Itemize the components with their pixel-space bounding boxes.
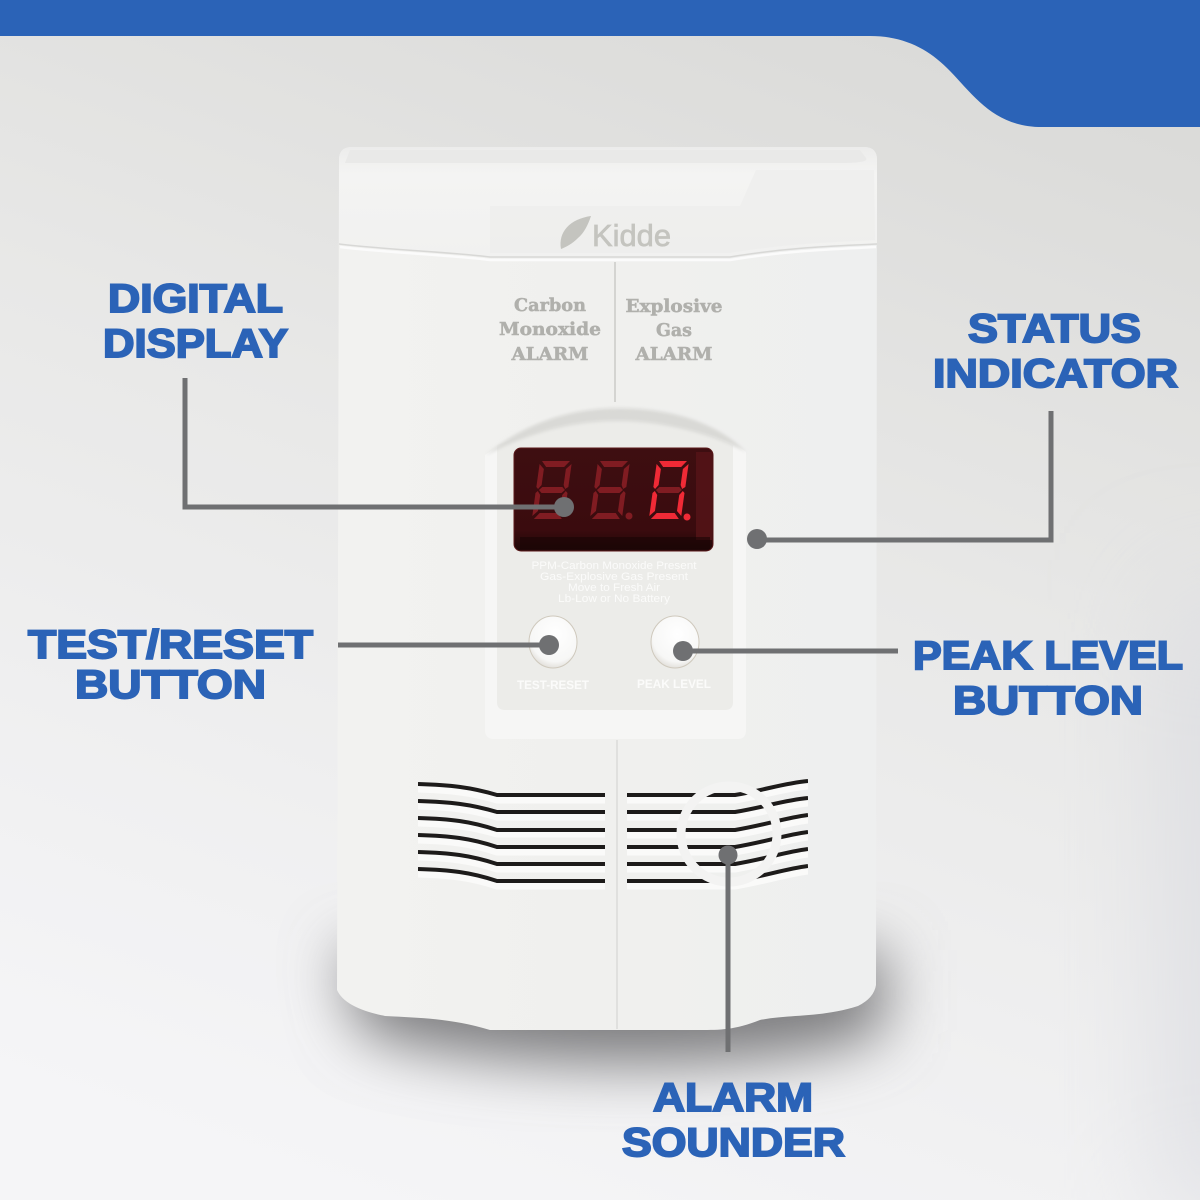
- alarm device: [337, 147, 877, 1030]
- right speaker vents: [627, 781, 808, 886]
- label: alarm sounder: [622, 1076, 845, 1165]
- label: alarm sounder: SOUNDER: [622, 1121, 845, 1165]
- callout dots: [539, 497, 767, 864]
- label: status indicator: [933, 307, 1178, 396]
- top blue banner: [0, 0, 1200, 127]
- explosive gas alarm text: Gas: [656, 320, 692, 341]
- carbon monoxide alarm text: Monoxide: [499, 319, 601, 340]
- label: digital display: DIGITAL: [108, 277, 283, 321]
- center divider line top: [614, 262, 616, 402]
- label: peak level button: BUTTON: [953, 679, 1143, 723]
- peak level caption: PEAK LEVEL: [637, 677, 711, 691]
- icon: leaf: [561, 216, 591, 249]
- panel arch shadow: [486, 408, 746, 455]
- LED display: [514, 448, 713, 551]
- Kidde logo: [561, 216, 671, 253]
- carbon monoxide alarm text: [499, 295, 601, 365]
- digit 3: [649, 461, 689, 519]
- label: peak level button: PEAK LEVEL: [913, 634, 1183, 678]
- embossed instructions: Move to Fresh Air: [568, 582, 660, 594]
- embossed instructions: Lb-Low or No Battery: [558, 593, 671, 605]
- label: digital display: DISPLAY: [103, 322, 288, 366]
- label: digital display: [103, 277, 288, 366]
- device shadow: [340, 950, 885, 1064]
- test/reset caption: TEST-RESET: [517, 678, 590, 692]
- label: test/reset button: BUTTON: [75, 663, 266, 707]
- decimal point 2: [626, 512, 632, 520]
- label: status indicator: INDICATOR: [933, 352, 1178, 396]
- digit 1: [532, 461, 572, 519]
- test/reset button: [517, 616, 590, 692]
- display and button panel: [485, 408, 746, 739]
- peak level button: [637, 616, 711, 691]
- device body: [337, 147, 877, 1030]
- Kidde logo: Kidde: [592, 218, 671, 253]
- label: status indicator: STATUS: [968, 307, 1141, 351]
- callout lines: [185, 378, 1051, 1052]
- panel outer rim: [485, 408, 746, 739]
- sounder ring: [681, 786, 777, 882]
- explosive gas alarm text: [626, 296, 722, 365]
- embossed instructions: [532, 560, 696, 605]
- explosive gas alarm text: Explosive: [626, 296, 722, 317]
- carbon monoxide alarm text: ALARM: [510, 344, 589, 365]
- left speaker vents: [418, 784, 605, 886]
- embossed instructions: Gas-Explosive Gas Present: [540, 571, 688, 583]
- explosive gas alarm text: ALARM: [634, 344, 713, 365]
- digit 2: [590, 461, 630, 519]
- label: peak level button: [913, 634, 1183, 723]
- center divider line bottom: [616, 740, 618, 1029]
- label: alarm sounder: ALARM: [653, 1076, 813, 1120]
- decimal point 3: [684, 514, 690, 520]
- label: test/reset button: TEST/RESET: [28, 623, 313, 667]
- embossed instructions: PPM-Carbon Monoxide Present: [532, 560, 696, 572]
- panel inner: [497, 420, 733, 710]
- carbon monoxide alarm text: Carbon: [514, 295, 586, 316]
- device top cap: [339, 147, 877, 256]
- label: test/reset button: [28, 623, 313, 707]
